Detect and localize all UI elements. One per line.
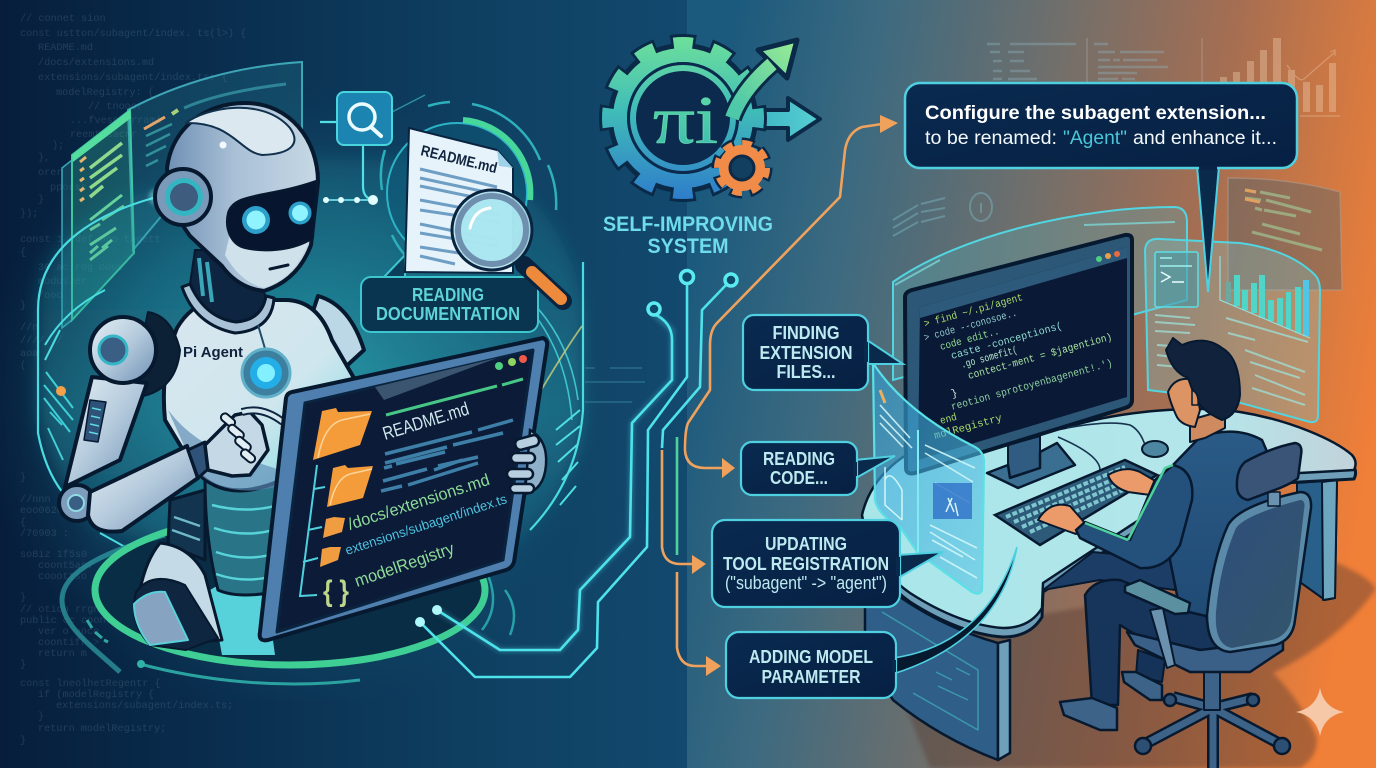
background code text: return modelRegistry; [38, 723, 166, 735]
background code text: cooottso [38, 572, 87, 583]
document area [320, 92, 563, 332]
background code text: // tnooor [88, 101, 143, 113]
background code text: // otion rrgnoon [20, 604, 118, 616]
background code text: { [20, 517, 26, 529]
callout: adding model parameter: PARAMETER [762, 666, 860, 687]
monitor terminal code: end [939, 412, 958, 428]
background code text: ver o ooco [38, 627, 99, 638]
orange arrowheads [692, 115, 898, 676]
monitor terminal code: } [950, 388, 959, 401]
background code text: ); [52, 140, 64, 152]
background code text: /70903 : [20, 528, 69, 540]
monitor terminal code: .go somefit( [960, 345, 1019, 372]
background code text: pporss [50, 183, 87, 194]
back holographic panel behind monitor [893, 207, 1187, 380]
arm and hands [1038, 465, 1192, 568]
callout: user prompt bubble: "Agent" [1063, 127, 1127, 149]
robot collar and neck [182, 250, 274, 333]
background: left dark blue half [0, 0, 687, 768]
desk right leg [1297, 480, 1337, 600]
tablet file names: extensions/subagent/index.ts [343, 491, 509, 558]
panel text lines [1155, 315, 1308, 405]
icon: sparkle [1296, 688, 1344, 736]
tablet screen [260, 338, 547, 640]
background code text: soBiz 1f5s0 [20, 549, 87, 561]
background code text: README.md [38, 42, 93, 54]
background code text [20, 13, 246, 747]
glass panel in front of monitor [873, 363, 984, 594]
monitor terminal code: caste -conceptions( [950, 321, 1064, 363]
background code text: // connet sion [20, 13, 106, 25]
monitor terminal code: > code --conosoe.. [923, 308, 1019, 345]
background code text: extensions/subagent/index.ts; [56, 700, 233, 712]
background code text: ...fvesnt.rrami [70, 115, 162, 127]
desk [862, 409, 1356, 760]
background code text: /ooo [38, 290, 62, 302]
background code text: extensions/subagent/index.ts: { [38, 72, 228, 84]
callout: reading code [741, 442, 895, 495]
tablet file names: README.md [380, 398, 471, 444]
mouse and cable [1058, 423, 1168, 470]
circuit lines [415, 115, 898, 677]
callout: finding extension files [743, 315, 903, 390]
background code text: const lneolhetRegentr { [20, 678, 161, 690]
floating code panel behind robot [128, 62, 302, 250]
callout: finding extension files: FILES... [776, 361, 836, 382]
label: reading documentation: READING [412, 285, 484, 305]
background code text: } [20, 659, 26, 671]
desk top edge [862, 418, 1356, 637]
callout: finding extension files: EXTENSION [760, 342, 852, 363]
background code text: 30 ac rog ooue [38, 263, 124, 274]
background: right blue to orange half [687, 0, 1376, 768]
monitor terminal code: contect-ment = $jagention) [967, 332, 1114, 383]
arrow up and right [732, 40, 797, 118]
robot hips and abdomen [134, 470, 286, 655]
background code text: if (modelRegistry { [38, 689, 154, 701]
faint lines in middle [585, 368, 645, 402]
office chair [1125, 443, 1311, 768]
callout: reading code: CODE... [770, 467, 828, 488]
background code text: { [20, 247, 26, 259]
tablet file names [323, 398, 509, 608]
logo: self-improving gear [603, 40, 820, 258]
background code text: //n [20, 322, 38, 334]
desk surface [862, 409, 1356, 628]
background code text: const 1 sdef ooo tagett [20, 234, 161, 246]
faint charts top right [987, 38, 1340, 116]
keyboard [995, 460, 1157, 545]
backrest [1207, 492, 1311, 652]
robot: Pi Agent [59, 103, 364, 655]
callout: user prompt bubble: to be renamed: [925, 127, 1057, 149]
robot name label: Pi Agent [183, 344, 243, 361]
background code text: coontifr > [38, 637, 99, 649]
callout: updating tool registration: ("subagent" -> "agent") [725, 572, 887, 593]
callout: updating tool registration: UPDATING [765, 533, 847, 554]
background code text: coont5as: [38, 561, 93, 572]
robot arm and hand [59, 312, 283, 532]
icon: search box [320, 92, 392, 205]
cyan circuit lines [420, 284, 727, 677]
callout: user prompt bubble: and enhance it... [1133, 127, 1277, 149]
robot torso [164, 300, 362, 490]
background code text: public cc coont [20, 615, 112, 627]
orange connector lines with arrows [662, 124, 882, 666]
monitor terminal code [923, 292, 1114, 443]
background code text: }); [20, 208, 38, 220]
tablet file names: /docs/extensions.md [346, 471, 492, 534]
torso [1170, 432, 1275, 625]
callout: adding model parameter [726, 547, 1017, 698]
tablet file names: modelRegistry [352, 539, 457, 591]
callout: reading code: READING [763, 448, 835, 469]
icon: circuit terminal dots [648, 270, 737, 315]
callout: updating tool registration: TOOL REGISTRATION [723, 553, 889, 574]
background code text: eoo0626.oo [20, 506, 81, 517]
legs [1043, 552, 1225, 730]
holographic band around robot [38, 160, 583, 560]
callout: finding extension files: FINDING [772, 322, 840, 343]
background code text: //// // [20, 335, 63, 347]
background code text: } [20, 472, 26, 484]
label: reading documentation: DOCUMENTATION [376, 304, 520, 324]
circle arcs around document [381, 95, 556, 263]
tablet file names: { } [323, 575, 349, 608]
small orange gear [719, 145, 765, 191]
background code text: } [20, 592, 26, 604]
monitor terminal code: mdlRegistry [933, 413, 1004, 443]
headrest [1237, 443, 1301, 506]
callout: updating tool registration [712, 520, 943, 607]
tablet file tree [300, 408, 373, 596]
background code text: ( [20, 360, 26, 372]
callout: user prompt bubble [905, 83, 1297, 292]
background code text: return m [38, 649, 87, 660]
head [1166, 338, 1240, 442]
desk left leg [865, 597, 1010, 760]
background code text: reemt.sacnr [70, 130, 137, 141]
background code text: modusJer [38, 276, 87, 288]
robot hand gripping tablet [507, 430, 546, 494]
logo title: SELF-IMPROVING [603, 213, 773, 236]
floor shadow below desk and chair [880, 563, 1375, 768]
monitor terminal code: reotion sprotoyenbagenent!.') [950, 358, 1114, 414]
icon: magnifying glass [452, 190, 563, 301]
background code text: } [20, 735, 26, 747]
monitor terminal code: code edit.. [939, 326, 1001, 354]
background: teal glow behind robot [0, 60, 687, 700]
callout: adding model parameter: ADDING MODEL [749, 646, 873, 667]
background code text: //nnn [20, 494, 51, 506]
large gear [609, 44, 757, 192]
base rings under robot [62, 515, 514, 684]
background code text: const ustton/subagent/index. ts(l>) { [20, 28, 246, 40]
robot chest core [242, 325, 290, 397]
faint icons under top bubble [893, 193, 992, 236]
document page README.md [405, 128, 513, 273]
monitor terminal code: > find ~/.pi/agent [923, 292, 1024, 331]
green code panel [62, 110, 134, 328]
armrest [1125, 580, 1190, 668]
robot head [155, 103, 318, 291]
background code text: modelRegistry: { [56, 87, 154, 99]
logo title: SYSTEM [648, 235, 728, 258]
background code text: } [38, 194, 44, 206]
faint code panel right [1228, 178, 1342, 290]
document page README.md: README.md [419, 142, 499, 177]
background code text: aoa [20, 349, 38, 360]
mini terminal [1155, 252, 1198, 307]
pi symbol: πi [653, 82, 718, 158]
callout: user prompt bubble: Configure the subagent extension... [925, 102, 1266, 124]
label: reading documentation [361, 255, 538, 332]
robot far shoulder [310, 296, 364, 372]
monitor [905, 235, 1132, 488]
chair seat [1127, 632, 1283, 672]
green circuit segment [676, 437, 678, 555]
arrow right [735, 98, 820, 140]
background code text: } [38, 711, 44, 723]
background code text: orer [38, 168, 62, 179]
logo title [603, 213, 773, 258]
mini bar chart [1220, 256, 1310, 338]
chair base and wheels [1135, 672, 1290, 768]
background code text: }, [38, 152, 50, 164]
background code text: } [20, 300, 26, 312]
person at desk [1038, 338, 1275, 730]
background code text: /docs/extensions.md [38, 57, 154, 69]
holographic chart panel [1145, 239, 1320, 422]
